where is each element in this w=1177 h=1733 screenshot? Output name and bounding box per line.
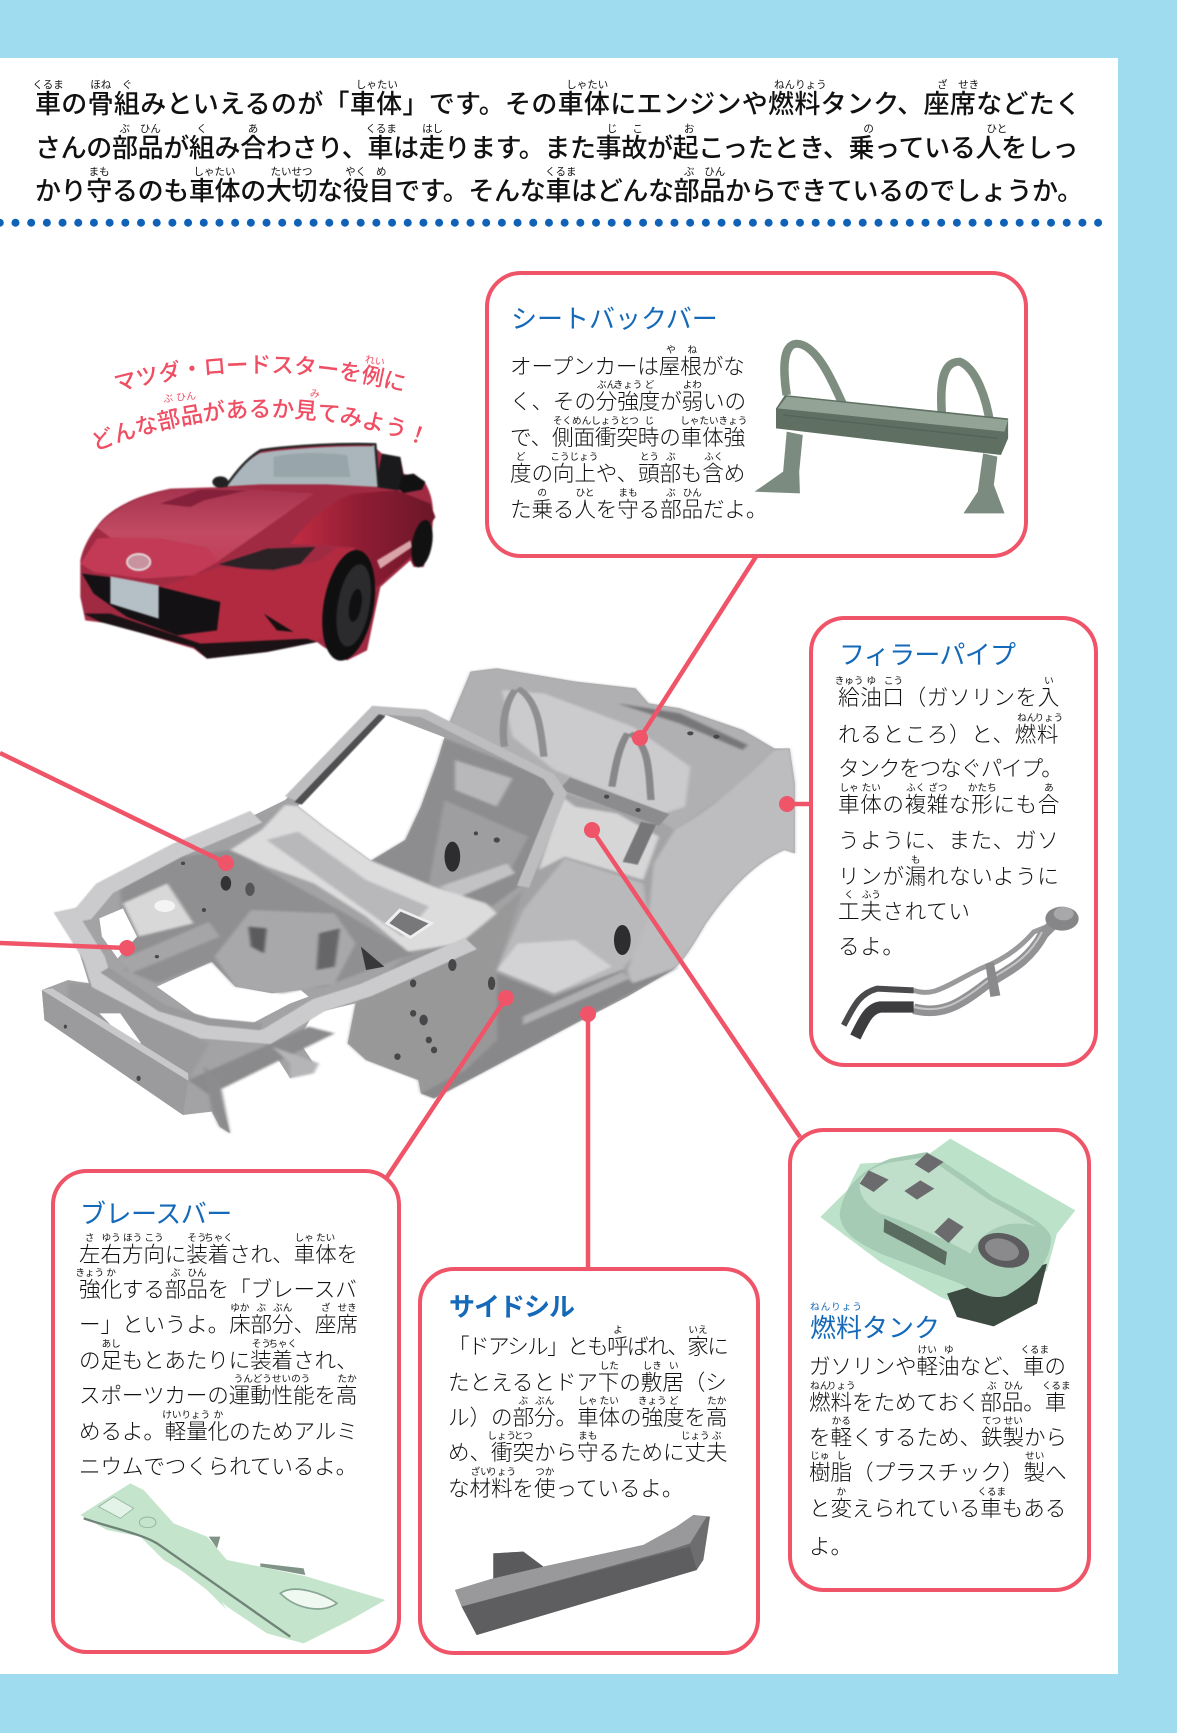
text: brace bar description: めるよ。軽量化のためアルミ bbox=[79, 1419, 358, 1444]
text: side sill description: な材料を使っているよ。 bbox=[448, 1476, 683, 1501]
text: side sill description: い bbox=[669, 1360, 679, 1372]
heading: brace bar: ブレースバー bbox=[80, 1198, 232, 1228]
body detail shading bbox=[68, 668, 795, 1133]
intro text: ほね bbox=[90, 79, 111, 91]
text: side sill description: しき bbox=[643, 1360, 662, 1372]
panel: side sill: いえ bbox=[688, 1324, 708, 1336]
text: fuel tank description: し bbox=[836, 1450, 846, 1462]
text: filler pipe description: るよ。 bbox=[838, 934, 905, 959]
intro text: ぐ bbox=[122, 79, 132, 91]
text: side sill description: した bbox=[600, 1360, 619, 1372]
text: side sill description: ざい bbox=[471, 1466, 490, 1478]
text: seat back bar description: ふく bbox=[704, 452, 723, 462]
text: seat back bar description: ぶん bbox=[597, 380, 616, 390]
panel: seat back bar bbox=[485, 271, 1028, 558]
heading: curved call to action: マツダ・ロードスターを例に bbox=[114, 355, 405, 391]
intro text: まも bbox=[89, 166, 110, 178]
text: filler pipe description: あ bbox=[1044, 782, 1054, 794]
heading: curved call to action: どんな部品があるか見てみよう！ bbox=[93, 398, 422, 449]
text: fuel tank description: かる bbox=[832, 1416, 851, 1426]
text: filler pipe description: れるところ）と、燃料 bbox=[838, 722, 1059, 747]
heading: fuel tank: 燃料タンク bbox=[810, 1312, 940, 1342]
panel: brace bar: そう bbox=[187, 1232, 207, 1244]
text: fuel tank description: くるま bbox=[977, 1486, 1006, 1498]
text: side sill description: まも bbox=[578, 1430, 597, 1442]
text: fuel tank description: りょう bbox=[827, 1380, 856, 1392]
text: brace bar description: そう bbox=[252, 1338, 271, 1350]
intro text: ぶ bbox=[684, 166, 694, 178]
panel: brace bar: こう bbox=[144, 1232, 164, 1244]
text: brace bar description bbox=[75, 1232, 358, 1479]
text: seat back bar description: た乗る人を守る部品だよ。 bbox=[510, 497, 767, 522]
panel: brace bar: しゃ bbox=[295, 1232, 314, 1244]
panel: side sill: よ bbox=[613, 1324, 623, 1336]
text: brace bar description: ー」というよ。床部分、座席 bbox=[79, 1312, 358, 1337]
intro text: やく bbox=[345, 166, 366, 178]
text: brace bar description: か bbox=[106, 1268, 116, 1278]
intro text: ぶ bbox=[120, 122, 130, 134]
panel: filler pipe: い bbox=[1044, 676, 1054, 686]
heading: side sill: サイドシル bbox=[449, 1292, 574, 1322]
engine bay opening bbox=[157, 962, 309, 1027]
image: red Mazda Roadster bbox=[79, 442, 436, 662]
text: fuel tank description: よ。 bbox=[809, 1534, 852, 1559]
text: fuel tank description: 樹脂（プラスチック）製へ bbox=[809, 1460, 1066, 1485]
text: fuel tank description: ぶ bbox=[987, 1380, 997, 1392]
intro text: く bbox=[196, 122, 207, 134]
image: fuel tank part bbox=[820, 1138, 1076, 1326]
panel: fuel tank: けい bbox=[918, 1344, 937, 1356]
text: brace bar description: せき bbox=[338, 1302, 357, 1314]
image: side sill part bbox=[455, 1515, 710, 1635]
text: seat back bar description: で、側面衝突時の車体強 bbox=[510, 425, 745, 450]
text: side sill description: しょう bbox=[487, 1430, 516, 1442]
intro text: お bbox=[684, 122, 694, 134]
text: seat back bar description: ぶ bbox=[666, 452, 676, 462]
intro text: くるま bbox=[545, 166, 576, 178]
text: fuel tank description: せい bbox=[1025, 1450, 1044, 1462]
text: seat back bar description: とう bbox=[640, 452, 659, 462]
text: side sill description: じょう bbox=[681, 1430, 710, 1442]
strut tower and opening bbox=[99, 900, 431, 958]
text: side sill description: め、衝突から守るために丈夫 bbox=[448, 1440, 727, 1465]
text: filler pipe description: タンクをつなぐパイプ。 bbox=[838, 756, 1062, 781]
heading: filler pipe: フィラーパイプ bbox=[839, 640, 1015, 670]
text: filler pipe description: りょう bbox=[1034, 712, 1063, 724]
intro text: たいせつ bbox=[270, 166, 312, 178]
text: brace bar description: ちゃく bbox=[268, 1338, 297, 1350]
panel: side sill bbox=[418, 1267, 760, 1655]
text: brace bar description: ぶ bbox=[257, 1302, 266, 1314]
intro text: の bbox=[863, 122, 874, 134]
text: seat back bar description: しゃたいきょう bbox=[680, 416, 747, 426]
panel: seat back bar: や bbox=[666, 344, 676, 356]
intro text: かり守るのも車体の大切な役目です。そんな車はどんな部品からできているのでしょうか。 bbox=[35, 176, 1083, 206]
text: side sill description: きょう bbox=[638, 1396, 667, 1406]
text: fuel tank description: を軽くするため、鉄製から bbox=[809, 1425, 1067, 1450]
intro text: しゃたい bbox=[566, 79, 608, 91]
text: seat back bar description: よわ bbox=[683, 380, 702, 390]
text: filler pipe description: たい bbox=[862, 782, 881, 794]
text: brace bar description: たか bbox=[338, 1374, 357, 1384]
text: filler pipe description: ねん bbox=[1017, 712, 1036, 724]
text: fuel tank description: くるま bbox=[1042, 1380, 1071, 1392]
text: fuel tank description: せい bbox=[1004, 1416, 1023, 1426]
intro text: くるま bbox=[32, 79, 64, 91]
text: brace bar description: きょう bbox=[75, 1268, 104, 1278]
text: seat back bar description: ど bbox=[645, 380, 654, 390]
text: brace bar description: の足もとあたりに装着され、 bbox=[79, 1348, 358, 1373]
text: side sill description: ル）の部分。車体の強度を高 bbox=[448, 1405, 727, 1430]
panel: brace bar: ほう bbox=[123, 1232, 142, 1244]
mounting holes bbox=[64, 731, 720, 1081]
text: brace bar description: ゆか bbox=[230, 1302, 249, 1314]
image: seat back bar part bbox=[754, 340, 1008, 514]
text: fuel tank description: 燃料をためておく部品。車 bbox=[809, 1390, 1066, 1415]
text: brace bar description: ぶ bbox=[171, 1268, 180, 1278]
text: seat back bar description: く、その分強度が弱いの bbox=[510, 389, 746, 414]
intro text: じ bbox=[607, 122, 617, 134]
image: filler pipe part bbox=[841, 906, 1079, 1040]
text: seat back bar description bbox=[510, 344, 767, 522]
text: seat back bar description: の bbox=[537, 488, 547, 498]
text: filler pipe description: ふう bbox=[862, 890, 881, 900]
text: filler pipe description: しゃ bbox=[840, 782, 859, 794]
text: fuel tank description: てつ bbox=[982, 1416, 1001, 1426]
intro text: あ bbox=[248, 122, 258, 134]
text: filler pipe description: うように、また、ガソ bbox=[838, 828, 1059, 853]
window frame and front ring bbox=[68, 688, 664, 1037]
intro text: ひん bbox=[140, 122, 161, 134]
text: filler pipe description: ふく bbox=[906, 782, 925, 794]
intro text bbox=[32, 79, 1083, 206]
text: side sill description: 「ドアシル」とも呼ばれ、家に bbox=[448, 1334, 727, 1359]
text: fuel tank description: と変えられている車もある bbox=[809, 1496, 1066, 1521]
image: car body frame bbox=[42, 667, 796, 1134]
text: filler pipe description: も bbox=[911, 854, 920, 866]
intro text: はし bbox=[422, 122, 443, 134]
intro text: 車の骨組みといえるのが「車体」です。その車体にエンジンや燃料タンク、座席などたく bbox=[35, 89, 1081, 119]
body silhouette bbox=[42, 668, 795, 1133]
text: fuel tank description bbox=[809, 1344, 1071, 1559]
intro text: ざ bbox=[937, 79, 948, 91]
intro text: こ bbox=[632, 122, 643, 134]
heading: curved call to action: ぶ bbox=[162, 392, 174, 406]
panel: filler pipe: きゅう bbox=[835, 676, 863, 686]
text: brace bar description: 左右方向に装着され、車体を bbox=[79, 1242, 358, 1267]
text: seat back bar description: ぶ bbox=[666, 488, 676, 498]
panel: brace bar: ちゃく bbox=[204, 1232, 233, 1244]
panel: fuel tank bbox=[788, 1128, 1091, 1592]
text: filler pipe description bbox=[835, 676, 1063, 959]
panel: brace bar: さ bbox=[85, 1232, 95, 1244]
text: brace bar description: ひん bbox=[187, 1268, 207, 1278]
text: seat back bar description: ど bbox=[516, 452, 526, 462]
text: side sill description: たい bbox=[600, 1396, 619, 1406]
text: side sill description: たか bbox=[707, 1396, 726, 1406]
intro text: しゃたい bbox=[194, 166, 236, 178]
intro text: め bbox=[376, 166, 386, 178]
text: filler pipe description: 工夫されてい bbox=[838, 899, 971, 924]
text: brace bar description: ざ bbox=[321, 1302, 330, 1314]
text: brace bar description: ぶん bbox=[273, 1302, 292, 1314]
text: seat back bar description: ひん bbox=[683, 488, 702, 498]
heading: curved call to action: み bbox=[309, 389, 320, 400]
panel: fuel tank: ねんりょう bbox=[810, 1302, 863, 1312]
panel: brace bar: たい bbox=[316, 1232, 335, 1244]
panel: brace bar bbox=[51, 1169, 401, 1654]
text: filler pipe description: く bbox=[844, 890, 854, 900]
heading: curved call to action: れい bbox=[364, 353, 386, 369]
text: seat back bar description: そくめんしょうとつ bbox=[553, 416, 639, 426]
panel: filler pipe bbox=[809, 616, 1098, 1067]
text: fuel tank description: ガソリンや軽油など、車の bbox=[809, 1354, 1066, 1379]
text: brace bar description: 強化する部品を「ブレースバ bbox=[79, 1277, 357, 1302]
panel: fuel tank: ゆ bbox=[944, 1344, 954, 1356]
intro text: ひと bbox=[987, 122, 1007, 134]
intro text: くるま bbox=[366, 122, 397, 134]
intro text: さんの部品が組み合わさり、車は走ります。また事故が起こったとき、乗っている人をしっ bbox=[35, 132, 1078, 162]
intro text: せき bbox=[958, 79, 979, 91]
text: side sill description bbox=[448, 1324, 727, 1501]
panel: brace bar: ゆう bbox=[102, 1232, 121, 1244]
text: fuel tank description: か bbox=[836, 1486, 846, 1498]
image: brace bar part bbox=[80, 1484, 385, 1644]
text: side sill description: ぶ bbox=[712, 1430, 722, 1442]
text: brace bar description: スポーツカーの運動性能を高 bbox=[79, 1383, 357, 1408]
panel: filler pipe: こう bbox=[884, 676, 903, 686]
text: brace bar description: か bbox=[214, 1410, 223, 1420]
text: filler pipe description: ざつ bbox=[928, 782, 947, 794]
text: side sill description: ぶ bbox=[518, 1396, 528, 1406]
panel: filler pipe: ゆ bbox=[866, 676, 876, 686]
text: seat back bar description: 度の向上や、頭部も含め bbox=[510, 461, 745, 486]
intro text: ひん bbox=[704, 166, 725, 178]
windshield opening bbox=[298, 715, 445, 861]
text: brace bar description: けいりょう bbox=[162, 1410, 210, 1420]
text: side sill description: つか bbox=[535, 1466, 554, 1478]
text: side sill description: ぶん bbox=[535, 1396, 554, 1406]
text: brace bar description: うんどうせいのう bbox=[234, 1374, 310, 1384]
text: side sill description: たとえるとドア下の敷居（シ bbox=[448, 1370, 727, 1395]
text: fuel tank description: じゅ bbox=[810, 1450, 829, 1462]
text: seat back bar description: こうじょう bbox=[550, 452, 598, 462]
intro text: しゃたい bbox=[356, 79, 398, 91]
text: side sill description: しゃ bbox=[578, 1396, 597, 1406]
heading: seat back bar: シートバックバー bbox=[511, 304, 718, 334]
text: filler pipe description: リンが漏れないように bbox=[838, 864, 1060, 889]
text: fuel tank description: ねん bbox=[810, 1380, 829, 1392]
heading: curved call to action bbox=[93, 353, 422, 449]
text: filler pipe description: かたち bbox=[968, 782, 997, 794]
text: seat back bar description: ひと bbox=[576, 488, 595, 498]
leader lines and marker dots bbox=[0, 558, 809, 1267]
text: side sill description: ど bbox=[669, 1396, 679, 1406]
heading: curved call to action: ひん bbox=[176, 390, 197, 404]
panel: fuel tank: くるま bbox=[1020, 1344, 1049, 1356]
text: seat back bar description: オープンカーは屋根がな bbox=[510, 354, 745, 379]
text: brace bar description: あし bbox=[102, 1338, 121, 1350]
text: filler pipe description: 給油口（ガソリンを入 bbox=[838, 685, 1060, 710]
text: brace bar description: ニウムでつくられているよ。 bbox=[79, 1454, 357, 1479]
text: filler pipe description: 車体の複雑な形にも合 bbox=[838, 792, 1060, 817]
text: seat back bar description: まも bbox=[618, 488, 638, 498]
intro text: ねん bbox=[774, 79, 795, 91]
text: side sill description: とつ bbox=[514, 1430, 533, 1442]
text: side sill description: りょう bbox=[487, 1466, 516, 1478]
intro text: りょう bbox=[795, 79, 827, 91]
front bumper bbox=[42, 988, 188, 1115]
text: seat back bar description: きょう bbox=[614, 380, 642, 390]
text: fuel tank description: ひん bbox=[1004, 1380, 1023, 1392]
panel: seat back bar: ね bbox=[688, 344, 697, 356]
text: seat back bar description: じ bbox=[645, 416, 654, 426]
